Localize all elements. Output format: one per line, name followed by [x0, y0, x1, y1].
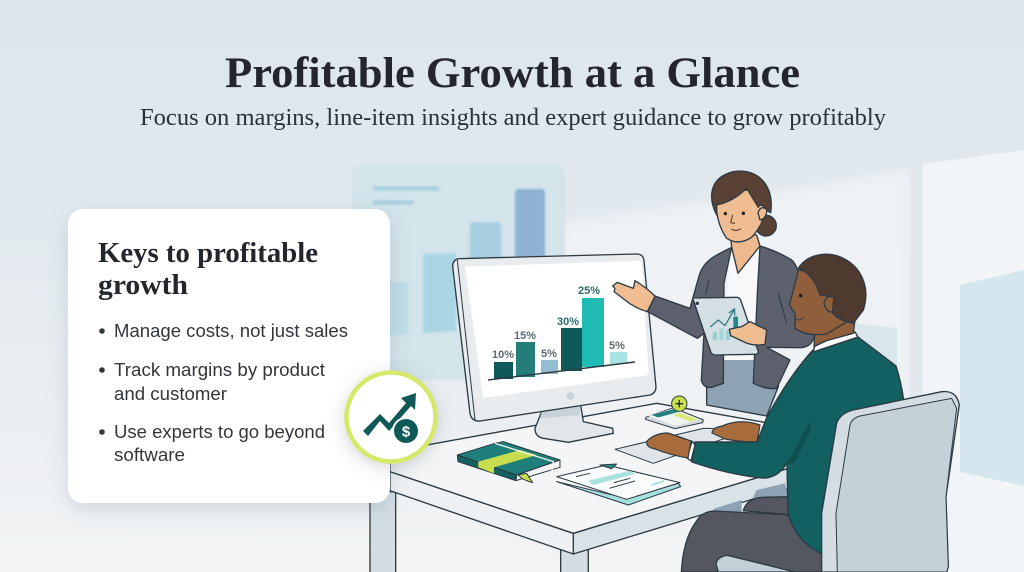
bullet list: Manage costs, not just sales: [114, 321, 348, 341]
holding hand: [729, 322, 767, 345]
label 25%: 25%: [578, 285, 600, 297]
small calculator card: [645, 408, 703, 429]
monitor bar chart: [488, 285, 635, 380]
woman facial features: [724, 212, 727, 215]
label 10%: 10%: [492, 349, 514, 361]
woman skirt: [707, 357, 778, 416]
man trousers: [681, 511, 822, 572]
background chart panel: [352, 165, 565, 380]
desk right leg: [561, 550, 588, 572]
bullet list: [99, 321, 348, 465]
panel heading: Keys to profitable: [98, 237, 318, 269]
plus badge: [672, 396, 687, 411]
monitor body: [453, 254, 656, 421]
document: [557, 464, 681, 505]
subtitle: Focus on margins, line-item insights and expert guidance to grow profitably: [140, 105, 886, 131]
bullet list: Use experts to go beyond: [114, 422, 325, 442]
title: Profitable Growth at a Glance: [225, 50, 800, 97]
label 5%: 5%: [541, 348, 557, 360]
panel heading: growth: [98, 269, 188, 301]
woman blazer left: [648, 247, 732, 387]
man far knee: [743, 497, 788, 515]
woman blouse: [723, 245, 761, 360]
illustration: woman presenter: [613, 171, 814, 416]
woman blazer right: [753, 246, 814, 389]
bullet list: software: [114, 445, 185, 465]
bullet list: Track margins by product: [114, 360, 325, 380]
office chair: [822, 391, 959, 572]
woman hair: [712, 171, 771, 215]
illustration: man lower body: [681, 483, 822, 572]
desk edge: [573, 468, 788, 554]
tablet: [693, 297, 758, 355]
illustration: desk: [370, 403, 788, 572]
notebook: [457, 442, 560, 483]
keyboard tablet: [615, 428, 730, 463]
icon: growth arrow and dollar badge: [346, 372, 436, 462]
shirt cuff: [687, 441, 695, 461]
panel heading: [98, 237, 318, 301]
label 30%: 30%: [557, 316, 579, 328]
label 15%: 15%: [514, 330, 536, 342]
man head: [789, 254, 866, 347]
shirt collar: [813, 332, 858, 352]
label 5% right: 5%: [609, 340, 625, 352]
desk top: [390, 403, 788, 533]
man hands: [647, 422, 760, 458]
icon: growth arrow and dollar badge: $: [402, 424, 411, 440]
desk items: [457, 396, 730, 505]
woman bun: [756, 215, 776, 236]
man jacket torso: [687, 332, 905, 553]
monitor screen: [465, 261, 649, 398]
woman pointing hand: [613, 281, 655, 312]
panel: keys to profitable growth: [68, 209, 390, 503]
monitor stand: [535, 405, 613, 442]
woman neck: [731, 235, 760, 273]
desk left leg: [370, 492, 396, 572]
illustration: monitor: [453, 254, 656, 442]
woman legs under desk: [712, 483, 788, 512]
bullet list: and customer: [114, 384, 227, 404]
chair seat slot: [716, 555, 795, 572]
woman face: [716, 188, 767, 242]
